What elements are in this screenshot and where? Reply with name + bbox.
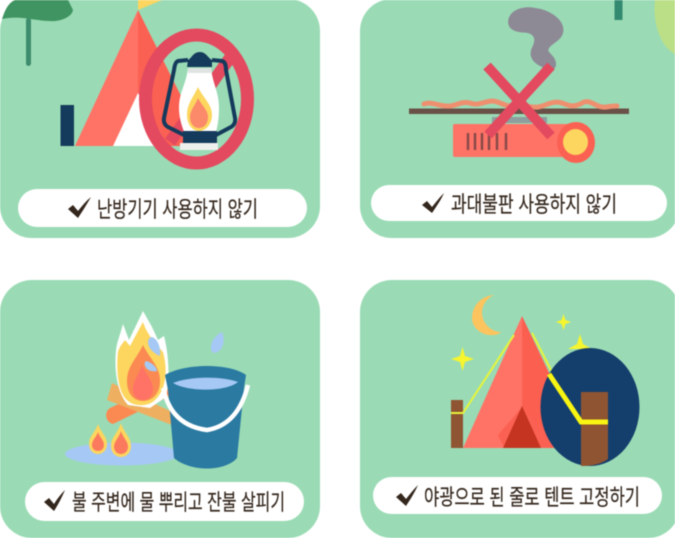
panel background bbox=[0, 280, 320, 538]
icon: lantern bbox=[164, 52, 235, 150]
icon: stars bbox=[451, 314, 592, 371]
icon: water puddle bbox=[65, 442, 179, 466]
icon: crescent moon bbox=[472, 295, 501, 335]
panel background bbox=[360, 280, 675, 538]
panel background bbox=[0, 0, 320, 238]
panel background bbox=[360, 0, 675, 238]
icon: bonfire flame bbox=[115, 311, 168, 408]
label bar bbox=[373, 477, 662, 514]
panel: water around the fire bbox=[0, 280, 320, 538]
icon: small flames bbox=[89, 423, 131, 457]
label text: 과대불판 사용하지 않기 bbox=[451, 192, 617, 217]
icon: check mark bbox=[44, 490, 65, 511]
label bar bbox=[371, 185, 667, 221]
icon: tent with post and flag bbox=[60, 0, 206, 146]
icon: tent bbox=[463, 316, 585, 448]
panel: no oversized griddle bbox=[360, 0, 675, 238]
icon: prohibition sign bbox=[146, 35, 248, 163]
label bar bbox=[25, 482, 304, 521]
icon: falling water drops bbox=[145, 332, 224, 371]
icon: smoke bbox=[508, 7, 563, 71]
icon: check mark bbox=[396, 485, 418, 506]
icon: leaf tree bbox=[2, 0, 73, 66]
label bar bbox=[18, 189, 307, 227]
icon: firewood bbox=[106, 383, 172, 425]
icon: magnified peg and rope bbox=[540, 348, 640, 466]
icon: check mark bbox=[422, 193, 444, 213]
panel: no heating appliances bbox=[0, 0, 320, 238]
panel: secure tent with luminous rope bbox=[360, 280, 675, 538]
label text: 불 주변에 물 뿌리고 잔불 살피기 bbox=[72, 490, 285, 515]
icon: red cross bbox=[487, 66, 551, 136]
icon: left peg and rope bbox=[451, 333, 552, 448]
icon: decorative tree corner bbox=[614, 0, 675, 54]
icon: portable gas stove bbox=[453, 117, 595, 163]
icon: griddle plate with meat bbox=[409, 101, 629, 114]
icon: water bucket bbox=[163, 366, 248, 468]
icon: check mark bbox=[68, 197, 91, 218]
label text: 난방기기 사용하지 않기 bbox=[97, 197, 258, 222]
